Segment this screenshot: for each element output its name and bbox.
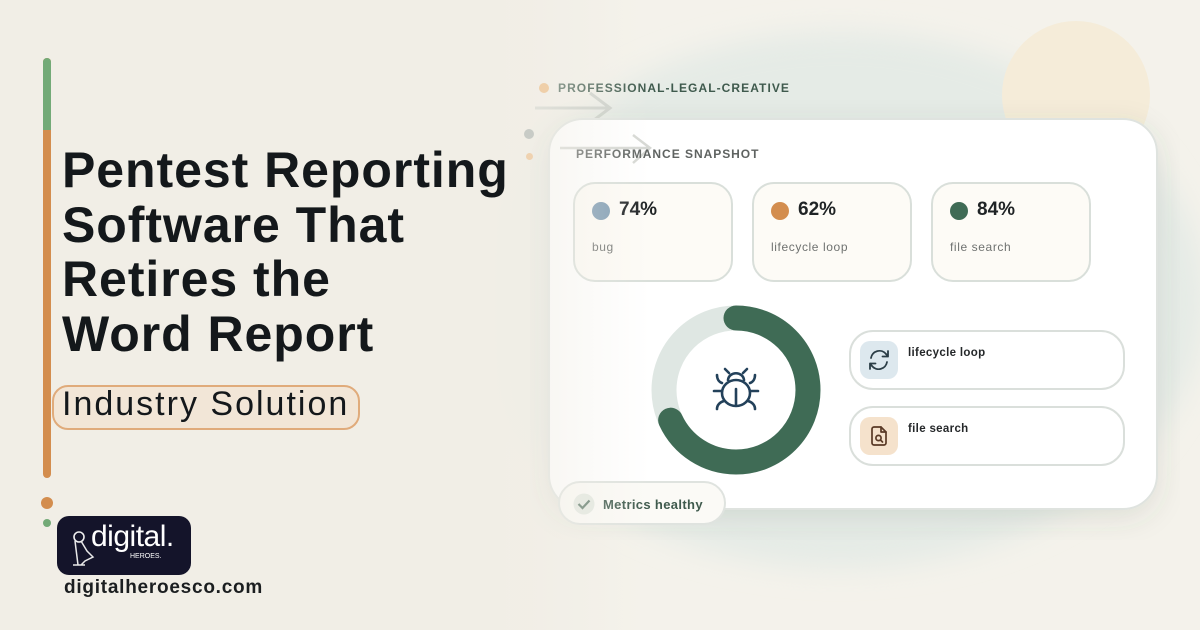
title [62,142,509,362]
value: 84% [977,199,1015,220]
accent bar [43,58,51,478]
label: file search [950,240,1011,254]
row label: file search [908,423,969,435]
title: Software That [62,196,405,252]
title: Word Report [62,306,374,362]
dot [771,202,789,220]
left-edge fade overlay [510,0,650,630]
status pill [558,481,726,525]
icon: file search [860,417,898,455]
dot: orange [41,497,53,509]
panel: performance card [548,118,1160,520]
value: 62% [798,199,836,220]
subtitle pill [52,385,360,430]
logo wordmark: digital. [91,520,174,553]
icon: check [574,494,594,514]
dot: peach [526,153,533,160]
dot [950,202,968,220]
title: Pentest Reporting [62,142,509,198]
dot: grey [524,129,534,139]
card heading: PERFORMANCE SNAPSHOT [576,147,759,161]
subtitle text: Industry Solution [62,385,349,423]
icon: bug [714,369,758,409]
row: file search [849,406,1125,466]
icon: hero figure [73,531,94,566]
decorative arrow over card [560,134,652,164]
title: Retires the [62,251,331,307]
label: bug [592,240,614,254]
logo subtext: HEROES. [130,553,162,560]
icon: refresh [860,341,898,379]
row label: lifecycle loop [908,347,985,359]
logo [57,516,191,575]
dot: label [539,83,549,93]
value: 74% [619,199,657,220]
website: digitalheroesco.com [64,577,263,598]
donut chart [652,306,820,474]
stat card: lifecycle loop [752,182,912,282]
stat card: file search [931,182,1091,282]
label: lifecycle loop [771,240,848,254]
dot [592,202,610,220]
stat card: bug [573,182,733,282]
decorative arrow behind label [535,92,612,118]
dot: green [43,519,51,527]
label: PROFESSIONAL-LEGAL-CREATIVE [558,81,790,95]
row: lifecycle loop [849,330,1125,390]
status text: Metrics healthy [603,497,703,512]
